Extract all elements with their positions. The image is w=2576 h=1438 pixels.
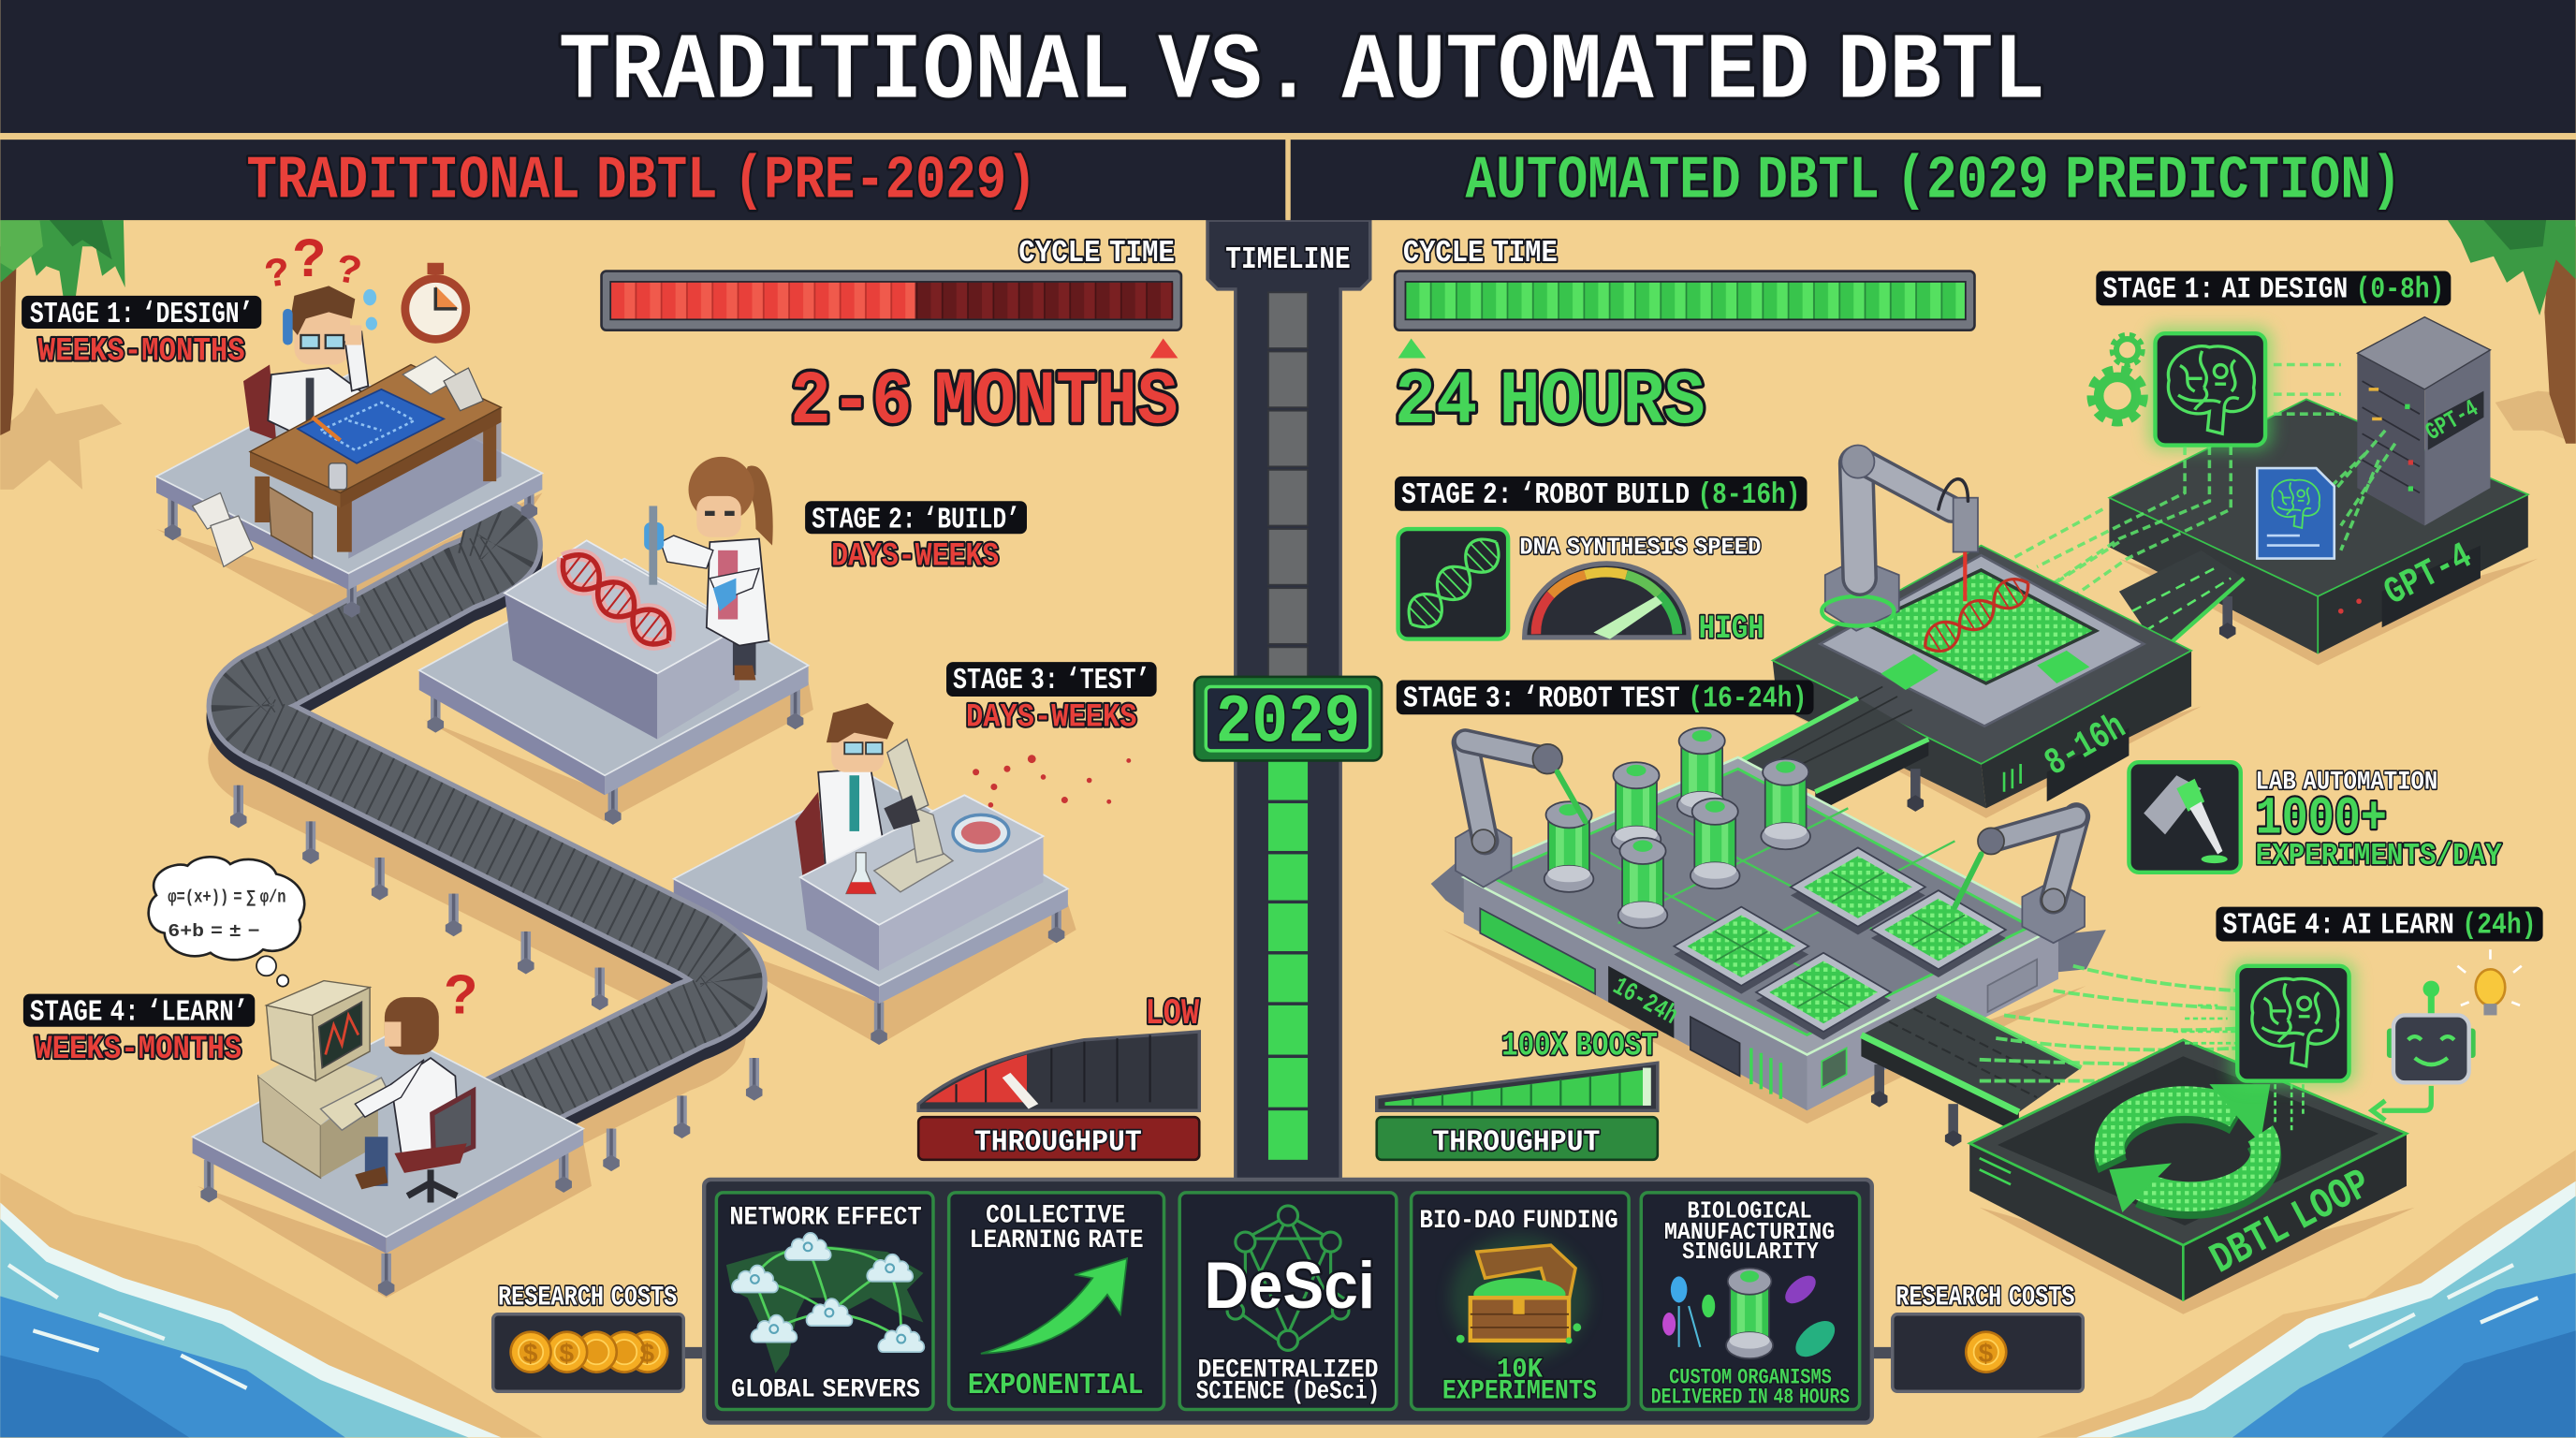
designer <box>268 286 368 435</box>
conveyor build to test <box>1741 686 1928 814</box>
chair <box>432 1091 474 1163</box>
DBTL loop platform <box>1969 1040 2415 1314</box>
automated cycle time: CYCLE TIME <box>1403 236 1558 271</box>
person 4 <box>391 1058 461 1163</box>
gears <box>2092 335 2144 421</box>
stage 2 label: DAYS-WEEKS <box>831 538 999 576</box>
stage 1 label: STAGE 1: ‘DESIGN’ <box>30 299 254 331</box>
card: network effect <box>716 1193 933 1410</box>
timeline column <box>1208 220 1370 1182</box>
red data particles <box>973 755 1131 808</box>
stage 3 label <box>946 662 1157 737</box>
thought bubble with equations: φ=(x+)) = ∑ φ/n <box>168 887 286 907</box>
person 3 with chair <box>796 792 827 895</box>
DNA synthesis speed gauge <box>1519 533 1764 648</box>
stage 4 label: WEEKS-MONTHS <box>35 1031 242 1068</box>
card: DeSci: DeSci <box>1205 1248 1375 1322</box>
platform shadows <box>156 492 1076 1298</box>
card: biological manufacturing singularity <box>1641 1193 1860 1410</box>
automated throughput gauge: THROUGHPUT <box>1432 1126 1600 1159</box>
DNA synthesis speed gauge: DNA SYNTHESIS SPEED <box>1519 533 1761 561</box>
stage 3 label: STAGE 3: ‘TEST’ <box>953 665 1150 697</box>
robot arm left test <box>1456 741 1586 888</box>
stage 1 label: WEEKS-MONTHS <box>38 332 245 370</box>
section header: automated: AUTOMATED DBTL (2029 PREDICTION) <box>1466 148 2402 216</box>
person 2: lab technician with pipette <box>644 457 773 680</box>
robot arm right test <box>1954 816 2085 943</box>
test plates <box>1674 847 2006 1040</box>
card: biological manufacturing singularity: CUSTOM ORGANISMS <box>1669 1365 1832 1389</box>
card: network effect: NETWORK EFFECT <box>729 1203 922 1232</box>
lab automation stat <box>2129 762 2502 874</box>
conveyor test to learn <box>1861 995 2082 1147</box>
research costs right: $ <box>1978 1342 1994 1371</box>
test platform <box>1431 757 2106 1123</box>
stage 1 AI design label: STAGE 1: AI DESIGN (0-8h) <box>2102 274 2444 307</box>
traditional cycle time: 2-6 MONTHS <box>790 360 1178 446</box>
data streams to AI learn <box>1980 966 2237 1081</box>
research costs left: $ <box>559 1342 575 1371</box>
brain tile stage 1 <box>2148 327 2272 450</box>
stage 2 label: STAGE 2: ‘BUILD’ <box>812 504 1020 536</box>
crt <box>267 1005 315 1081</box>
sweat drops <box>363 289 377 330</box>
research costs left: $ <box>639 1342 655 1371</box>
platform 2 with DNA table <box>419 540 809 825</box>
card: Bio-DAO funding: EXPERIMENTS <box>1442 1374 1597 1406</box>
stage 3 robot test label: STAGE 3: ‘ROBOT TEST (16-24h) <box>1403 683 1807 716</box>
petri dish <box>953 814 1009 851</box>
DNA icon tile <box>1398 529 1508 639</box>
card: DeSci <box>1179 1193 1397 1410</box>
timeline column: TIMELINE <box>1225 242 1351 278</box>
automated throughput gauge: 100X BOOST <box>1501 1028 1658 1065</box>
build platform 8-16h: 8-16h <box>2038 706 2133 785</box>
thought bubble with equations <box>149 857 304 987</box>
test station <box>796 703 1044 971</box>
robot arm build <box>1822 446 1978 631</box>
data streams from AI <box>2012 365 2395 605</box>
card: biological manufacturing singularity: BIOLOGICAL <box>1687 1196 1812 1225</box>
bottom DeSci panel <box>704 1180 1872 1423</box>
card: Bio-DAO funding: BIO-DAO FUNDING <box>1419 1207 1618 1236</box>
card: biological manufacturing singularity: DELIVERED IN 48 HOURS <box>1651 1386 1850 1410</box>
traditional cycle time: CYCLE TIME <box>1018 236 1175 271</box>
card: Bio-DAO funding: 10K <box>1497 1353 1543 1385</box>
card: collective learning rate: COLLECTIVE <box>986 1202 1125 1231</box>
conveyor legs <box>230 785 762 1171</box>
card: biological manufacturing singularity: SINGULARITY <box>1682 1238 1819 1266</box>
DBTL loop platform: DBTL LOOP <box>2203 1160 2379 1284</box>
card: network effect: GLOBAL SERVERS <box>731 1376 920 1405</box>
stage 4 label: STAGE 4: ‘LEARN’ <box>30 997 248 1030</box>
section header: traditional: TRADITIONAL DBTL (PRE-2029) <box>247 148 1037 216</box>
research costs left: $ <box>522 1342 538 1371</box>
palm tree left <box>0 220 125 490</box>
tower <box>258 1076 320 1178</box>
bio tanks <box>1544 727 1810 928</box>
section header: traditional <box>0 139 1285 220</box>
table <box>800 877 879 971</box>
research costs right: RESEARCH COSTS <box>1895 1281 2075 1313</box>
card: collective learning rate: LEARNING RATE <box>970 1226 1144 1255</box>
stage 3 label: DAYS-WEEKS <box>966 699 1137 737</box>
platform 1 with designer desk <box>156 286 542 618</box>
automated cycle time: 24 HOURS <box>1395 360 1705 446</box>
card: collective learning rate: EXPONENTIAL <box>968 1370 1144 1402</box>
crumpled papers <box>193 492 254 566</box>
build platform 8-16h <box>1773 546 2202 818</box>
question marks: ? <box>332 247 365 298</box>
conveyor belt: traditional <box>242 522 731 1125</box>
GPT-4 server tower: GPT-4 <box>2421 394 2483 447</box>
stacked tier above loop <box>2174 1005 2303 1134</box>
lab automation stat: LAB AUTOMATION <box>2256 768 2437 797</box>
platform 4 with computer <box>193 981 583 1296</box>
recycle arrows <box>2109 1084 2270 1212</box>
stage 4 AI learn label: STAGE 4: AI LEARN (24h) <box>2222 910 2537 943</box>
card: DeSci: SCIENCE (DeSci) <box>1196 1377 1380 1406</box>
GPT-4 server tower <box>2357 317 2490 526</box>
low throughput gauge: THROUGHPUT <box>974 1126 1142 1159</box>
desk <box>255 477 270 522</box>
question marks: ? <box>262 251 293 301</box>
beach water left <box>0 1173 542 1437</box>
low throughput gauge <box>918 993 1200 1160</box>
card: DeSci: DECENTRALIZED <box>1197 1356 1379 1385</box>
learn robot with bulb <box>2387 949 2522 1082</box>
low throughput gauge: LOW <box>1145 993 1200 1034</box>
research costs left: RESEARCH COSTS <box>498 1281 677 1313</box>
brain tile stage 4 <box>2231 961 2356 1086</box>
beach water right <box>2037 1150 2576 1437</box>
lab automation stat: EXPERIMENTS/DAY <box>2256 839 2502 874</box>
stopwatch <box>401 263 470 344</box>
palm tree right <box>2448 220 2576 444</box>
question marks: ? <box>293 229 326 293</box>
microscope <box>874 841 953 892</box>
question mark learn: ? <box>444 963 478 1026</box>
question marks <box>262 229 365 301</box>
DNA synthesis speed gauge: HIGH <box>1699 610 1764 648</box>
title banner <box>0 0 2576 139</box>
stage 4 label <box>23 994 255 1068</box>
thought bubble with equations: 6+b = ± − <box>168 921 260 942</box>
blueprint document <box>2257 468 2334 559</box>
lab automation stat: 1000+ <box>2256 789 2387 849</box>
stage 2 label <box>805 501 1027 576</box>
treasure chest <box>1456 1245 1581 1343</box>
chair <box>243 365 276 440</box>
flask <box>846 853 876 894</box>
automated cycle time <box>1395 236 1974 446</box>
stage 1 label <box>22 296 261 370</box>
traditional cycle time <box>602 236 1181 446</box>
card: Bio-DAO funding <box>1412 1193 1629 1410</box>
research costs left <box>493 1281 705 1391</box>
research costs right <box>1871 1281 2083 1391</box>
test platform: 16-24h <box>1607 973 1682 1032</box>
GPT-4 platform: GPT-4 <box>2378 536 2480 615</box>
title banner: TRADITIONAL VS. AUTOMATED DBTL <box>559 21 2045 126</box>
DNA helix red <box>553 546 679 653</box>
conveyor GPT-4 to build <box>2119 550 2244 653</box>
arrow robot to loop <box>2372 1086 2431 1121</box>
platform 3 (test station base) <box>674 775 1068 1045</box>
stage 2 robot build label: STAGE 2: ‘ROBOT BUILD (8-16h) <box>1401 479 1800 512</box>
2029 badge: 2029 <box>1216 684 1360 762</box>
card: biological manufacturing singularity: MANUFACTURING <box>1664 1218 1835 1246</box>
card: collective learning rate <box>949 1193 1164 1410</box>
GPT-4 platform <box>2109 399 2538 666</box>
automated throughput gauge <box>1377 1028 1658 1160</box>
